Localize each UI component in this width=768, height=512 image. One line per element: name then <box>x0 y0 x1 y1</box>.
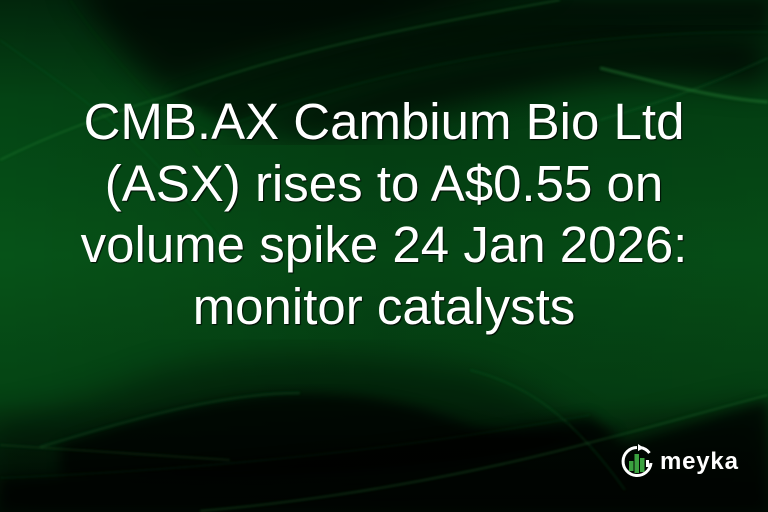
wordmark: meyka <box>660 448 739 475</box>
bottom dark hill and bands <box>0 356 768 512</box>
title: monitor catalysts <box>193 278 575 334</box>
logo: meyka <box>622 444 739 477</box>
title: volume spike 24 Jan 2026: <box>81 216 687 273</box>
title: CMB.AX Cambium Bio Ltd <box>84 93 684 150</box>
top dark lens shapes <box>70 0 560 95</box>
title <box>80 93 687 336</box>
title: (ASX) rises to A$0.55 on <box>105 154 663 212</box>
icon: ring with green bars <box>623 444 651 475</box>
